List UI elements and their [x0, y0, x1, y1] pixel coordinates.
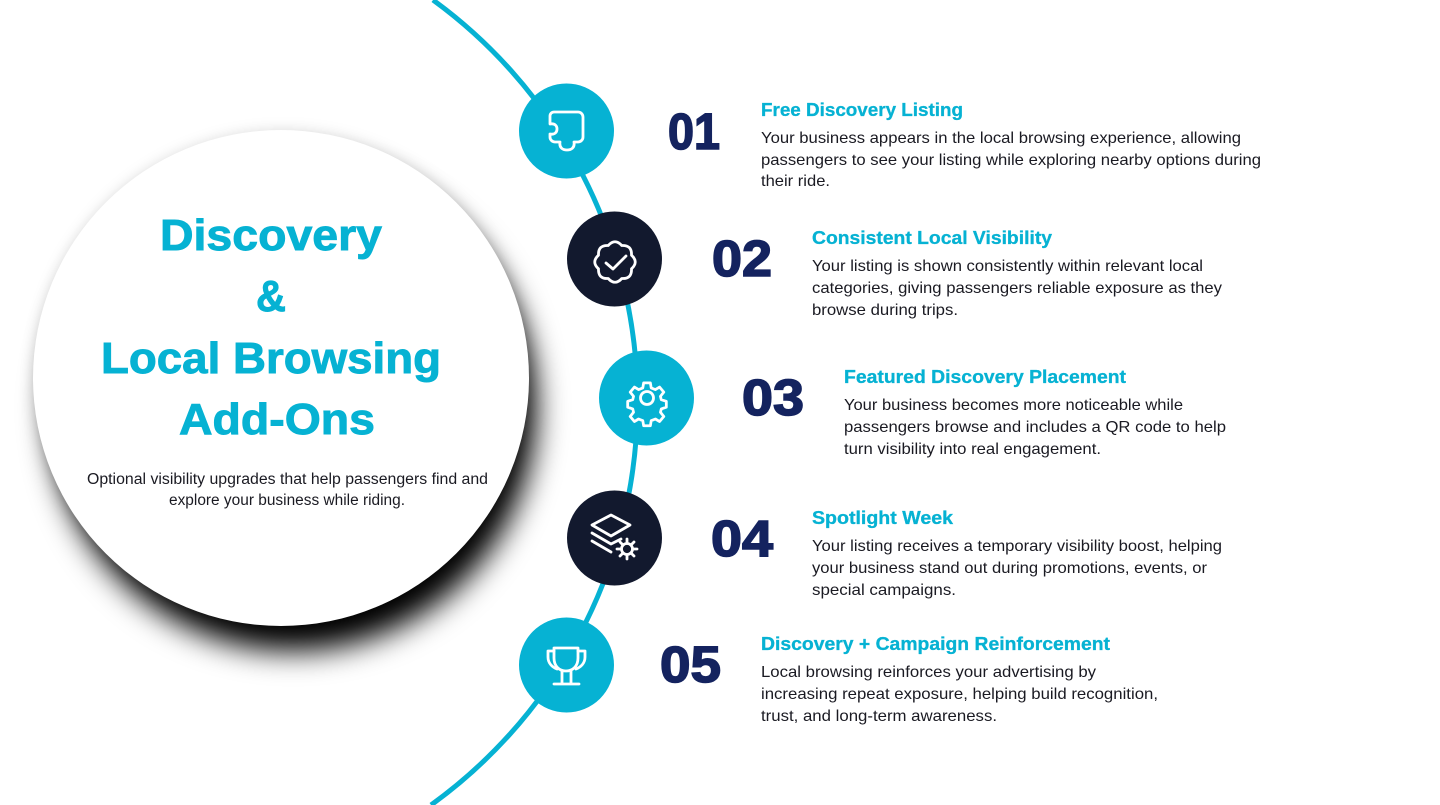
description: Your listing is shown consistently within relevant local	[812, 258, 1203, 275]
description: increasing repeat exposure, helping build recognition,	[761, 686, 1158, 703]
number 02: 02	[712, 230, 772, 287]
heading	[101, 211, 441, 444]
step 2	[567, 212, 1222, 319]
description: categories, giving passengers reliable exposure as they	[812, 280, 1222, 297]
icon: gear	[599, 350, 694, 446]
description: special campaigns.	[812, 582, 956, 599]
icon: puzzle piece	[519, 84, 614, 178]
description: your business stand out during promotions, events, or	[812, 560, 1208, 577]
icon: trophy	[519, 618, 614, 712]
description: Your listing receives a temporary visibility boost, helping	[812, 538, 1222, 555]
subtitle: explore your business while riding.	[169, 492, 405, 509]
description	[844, 397, 1226, 458]
icon: layers with gear	[567, 490, 662, 586]
description: turn visibility into real engagement.	[844, 441, 1101, 458]
step 3	[599, 350, 1226, 458]
description	[761, 664, 1158, 725]
description: their ride.	[761, 173, 830, 190]
step 4	[567, 490, 1222, 599]
heading: Discovery	[160, 211, 383, 260]
number 03: 03	[742, 369, 804, 426]
number 05: 05	[660, 636, 721, 693]
number 01: 01	[668, 103, 720, 160]
description: trust, and long-term awareness.	[761, 708, 997, 725]
description: Your business becomes more noticeable while	[844, 397, 1183, 414]
step 5	[519, 618, 1158, 725]
panel: title circle	[33, 130, 536, 651]
title: Free Discovery Listing	[761, 99, 963, 120]
description: Local browsing reinforces your advertising by	[761, 664, 1096, 681]
timeline arc	[431, 0, 637, 805]
circle soft outer glow	[34, 131, 532, 629]
icon: verified badge	[567, 212, 662, 306]
description: browse during trips.	[812, 302, 958, 319]
step 1	[519, 84, 1261, 190]
heading: Add-Ons	[179, 395, 375, 444]
description: passengers browse and includes a QR code to help	[844, 419, 1226, 436]
heading: Local Browsing	[101, 334, 441, 383]
title: Featured Discovery Placement	[844, 366, 1126, 387]
circle background	[33, 130, 529, 626]
title: Spotlight Week	[812, 507, 954, 528]
heading: &	[256, 272, 286, 321]
number 04: 04	[711, 510, 774, 567]
description: passengers to see your listing while exploring nearby options during	[761, 152, 1261, 169]
title: Consistent Local Visibility	[812, 227, 1053, 248]
circle drop shadow	[50, 165, 536, 651]
subtitle: Optional visibility upgrades that help passengers find and	[87, 471, 488, 488]
description: Your business appears in the local browsing experience, allowing	[761, 130, 1241, 147]
subtitle	[87, 471, 488, 509]
description	[761, 130, 1261, 190]
description	[812, 538, 1222, 599]
title: Discovery + Campaign Reinforcement	[761, 633, 1110, 654]
description	[812, 258, 1222, 319]
